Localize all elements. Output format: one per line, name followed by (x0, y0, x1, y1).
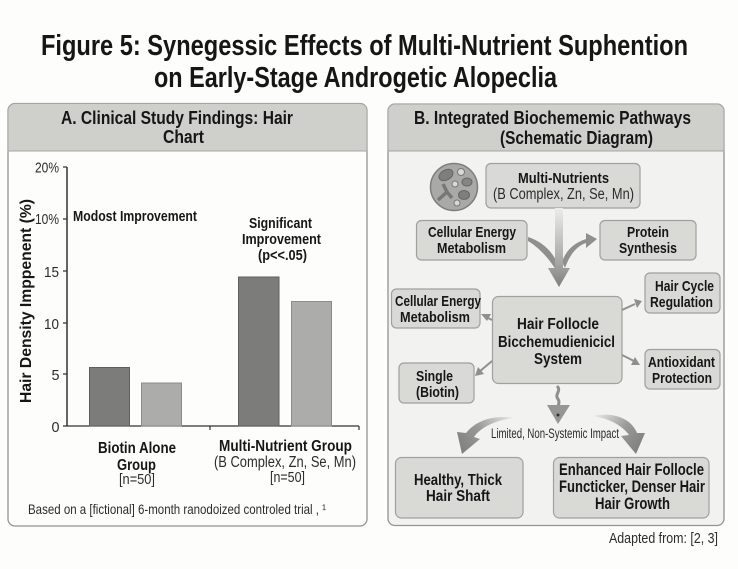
box: protein synthesis: Protein (627, 224, 669, 241)
box: cellular energy metabolism left: Metabolism (400, 309, 470, 326)
box: antioxidant protection (645, 350, 720, 389)
title: on Early-Stage Androgetic Alopeclia (154, 62, 558, 94)
box: single biotin: (Biotin) (416, 384, 459, 401)
title (41, 30, 688, 94)
annotation: significant improvement: Improvement (242, 231, 321, 248)
box: single biotin: Single (416, 368, 453, 385)
box: hair follicle system: Bicchemudienicicl (498, 334, 615, 351)
group label: multi-nutrient: (B Complex, Zn, Se, Mn) (214, 454, 356, 471)
box: cellular energy metabolism left (392, 289, 482, 328)
panel A heading: A. Clinical Study Findings: Hair (61, 107, 293, 128)
panel B heading: (Schematic Diagram) (500, 127, 653, 148)
arrow: curve to healthy hair shaft (457, 417, 515, 454)
arrow: to antioxidant (622, 355, 640, 365)
panel A heading: Chart (163, 126, 204, 147)
bar chart (18, 160, 359, 488)
box: single biotin (399, 363, 474, 403)
box: hair cycle regulation (645, 273, 720, 313)
box: enhanced hair follicle function: Enhanced Hair Follocle (559, 461, 704, 479)
bars: biotin alone (90, 368, 182, 426)
box: hair cycle regulation: Regulation (650, 294, 713, 311)
panel B heading (388, 104, 724, 151)
arrow: squiggle down (547, 386, 570, 424)
source note: Adapted from: [2, 3] (609, 531, 718, 547)
box: hair follicle system: System (534, 351, 582, 368)
box: cellular energy metabolism top: Metabolism (437, 240, 506, 257)
group label: multi-nutrient (214, 438, 356, 486)
arrow: curve from cellular energy (528, 237, 557, 270)
box: hair cycle regulation: Hair Cycle (655, 278, 714, 295)
box: multi-nutrients: Multi-Nutrients (518, 170, 609, 187)
annotation: significant improvement: Significant (249, 215, 312, 232)
group label: biotin: Group (117, 457, 156, 474)
group label: multi-nutrient: [n=50] (270, 470, 305, 486)
annotation: modest improvement: Modost Improvement (73, 209, 197, 225)
icon: cell with nutrients (430, 164, 478, 210)
group label: biotin: Biotin Alone (98, 440, 176, 457)
box: hair follicle system (492, 296, 622, 384)
arrow: to hair cycle (622, 299, 642, 310)
y axis tick labels (35, 160, 60, 436)
panel: A. clinical study findings (8, 104, 367, 526)
group label: multi-nutrient: Multi-Nutrient Group (219, 438, 352, 455)
group label: biotin (98, 440, 176, 488)
box: protein synthesis (600, 220, 696, 260)
y axis tick labels: 10 (44, 316, 59, 333)
box: healthy hair shaft: Healthy, Thick (414, 472, 502, 489)
box: protein synthesis: Synthesis (619, 240, 677, 257)
box: healthy hair shaft: Hair Shaft (426, 488, 491, 505)
y axis tick labels: 10% (35, 211, 59, 228)
box: multi-nutrients: (B Complex, Zn, Se, Mn) (493, 186, 634, 203)
box: enhanced hair follicle function: Functicker, Denser Hair (559, 478, 705, 496)
y axis title: Hair Density Imppenent (%) (18, 199, 35, 403)
group label: biotin: [n=50] (119, 472, 155, 488)
box: hair follicle system: Hair Follocle (517, 316, 599, 333)
footnote: Based on a [fictional] 6-month ranodoized controled trial , ¹ (28, 501, 326, 517)
arrow: main flow down (548, 208, 570, 287)
box: healthy hair shaft (396, 458, 523, 518)
box: cellular energy metabolism left: Cellular Energy (395, 293, 482, 310)
y axis tick labels: 20% (35, 160, 59, 176)
arrow: to cellular energy left (481, 314, 492, 321)
panel B heading: B. Integrated Biochememic Pathways (414, 107, 691, 128)
y axis tick labels: 5 (52, 367, 60, 384)
arrow: to single biotin (475, 361, 492, 376)
box: antioxidant protection: Protection (652, 370, 712, 387)
box: enhanced hair follicle function (554, 458, 709, 518)
y axis tick labels: 15 (44, 264, 59, 281)
box: antioxidant protection: Antioxidant (648, 354, 715, 371)
annotation: significant improvement: (p<<.05) (258, 247, 307, 264)
annotation: significant improvement (242, 215, 321, 264)
label: limited impact: Limited, Non-Systemic Impact (491, 426, 619, 441)
box: cellular energy metabolism top (416, 220, 527, 260)
panel A heading (8, 104, 367, 151)
arrow: curve to protein synthesis (562, 233, 597, 268)
axes and ticks (63, 167, 359, 430)
arrow: curve to enhanced function (592, 415, 645, 454)
panel: B. integrated pathways (388, 104, 724, 526)
box: cellular energy metabolism top: Cellular Energy (428, 224, 517, 241)
bars: multi-nutrient (238, 277, 332, 426)
box: multi-nutrients (486, 164, 640, 208)
box: enhanced hair follicle function: Hair Growth (595, 495, 670, 513)
y axis tick labels: 0 (52, 419, 60, 436)
